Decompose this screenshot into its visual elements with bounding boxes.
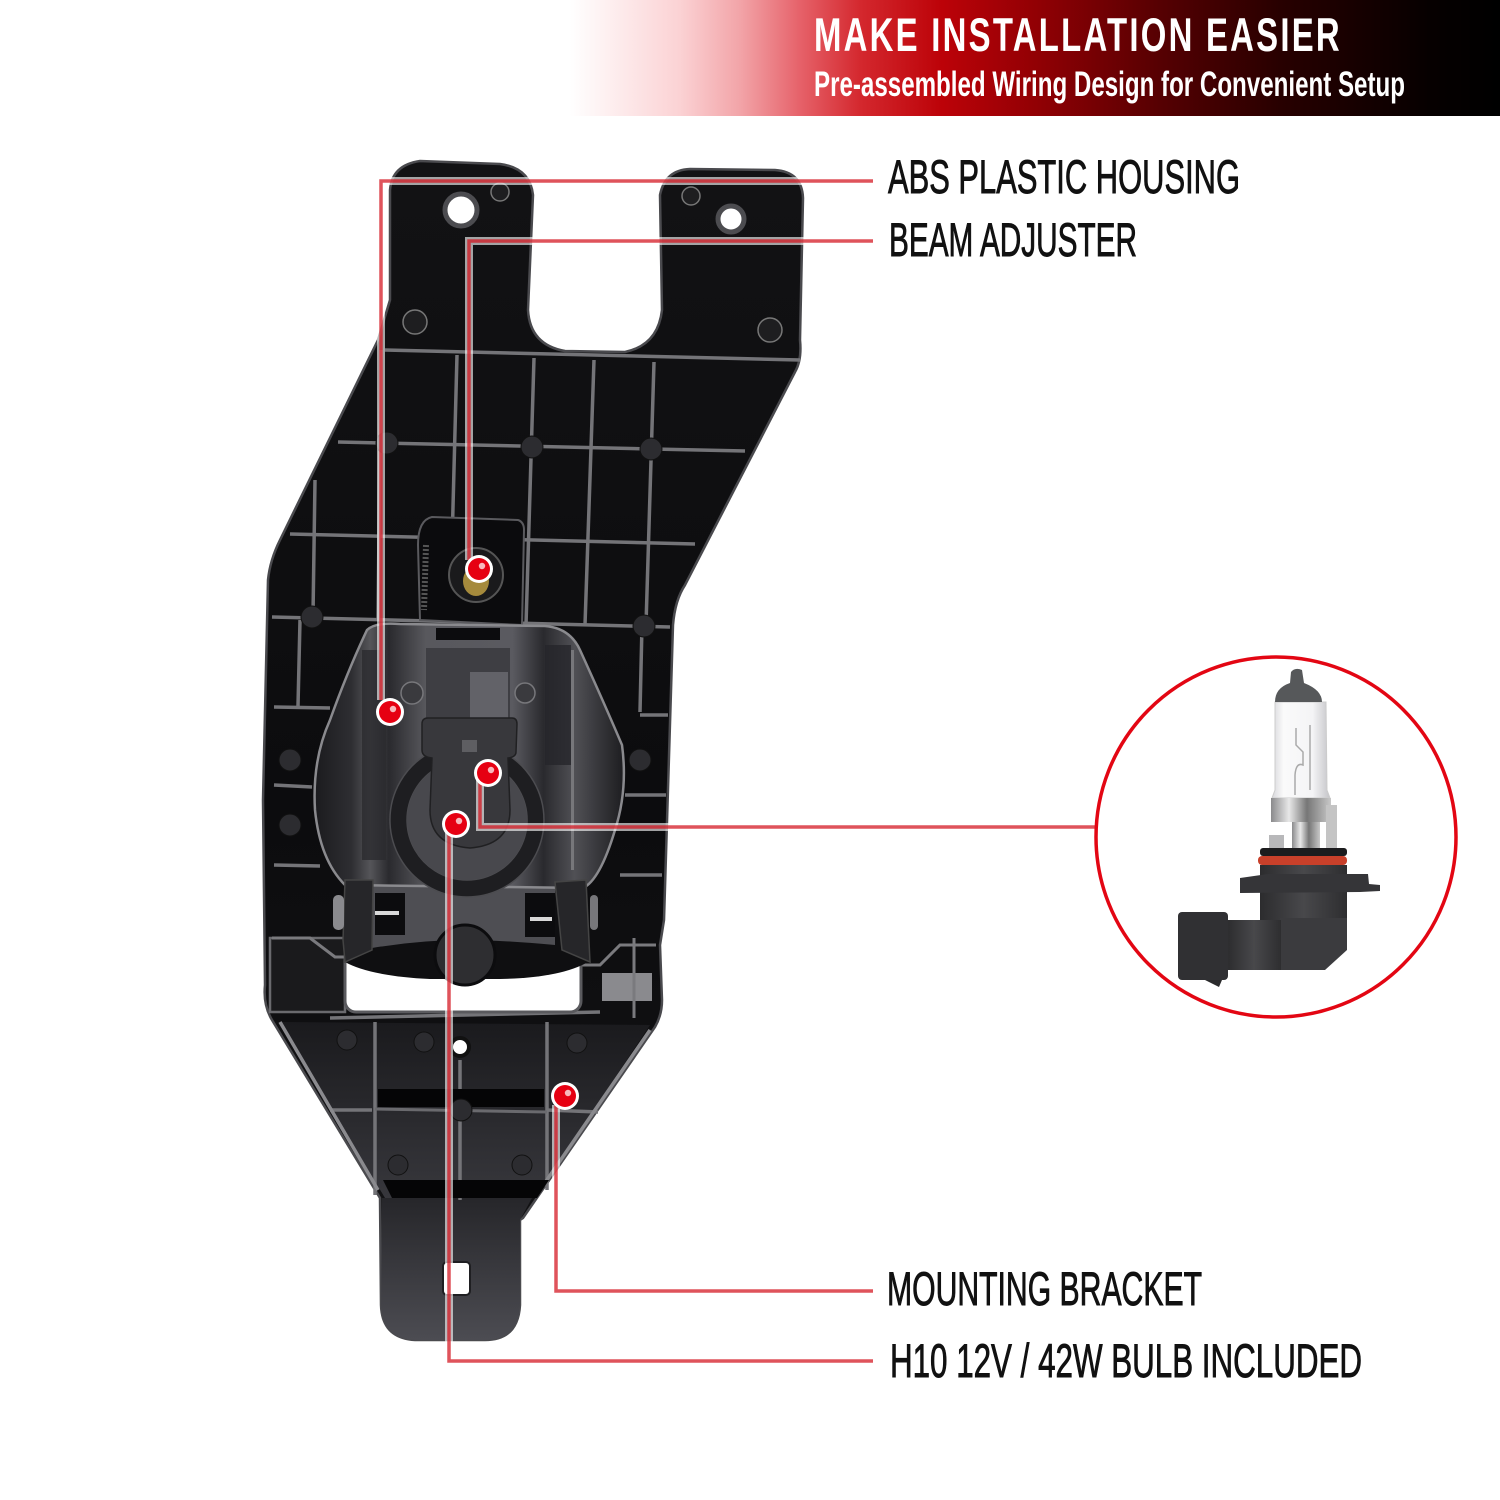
bulb socket ring (390, 743, 544, 897)
h10 halogen bulb (1178, 669, 1380, 987)
lamp housing (315, 624, 624, 888)
marker: beam adjuster (465, 555, 493, 583)
bulb base (1260, 865, 1347, 921)
connector tube (1227, 920, 1281, 970)
mounting hole left (445, 194, 477, 226)
filament (1295, 725, 1310, 795)
hinge silver clip left (375, 911, 399, 915)
dark shadow bands (378, 1089, 549, 1198)
socket inner (407, 760, 527, 880)
adjuster nut (449, 548, 503, 602)
lower-right pocket glossy patch (602, 973, 652, 1001)
adjuster spring (424, 545, 426, 610)
bulb detail inset (1096, 657, 1456, 1017)
metal centre column (1292, 822, 1320, 848)
label: abs plastic housing: ABS PLASTIC HOUSING (888, 150, 1240, 203)
marker: h10 bulb (442, 810, 470, 838)
flange (1240, 874, 1380, 893)
rib across lower plate (375, 1109, 547, 1112)
callout leader lines (381, 181, 1095, 1361)
hinge bolt left (333, 895, 344, 930)
orange o-ring (1258, 856, 1347, 865)
connector lock tab (462, 740, 477, 752)
plug clip (1205, 980, 1222, 987)
lamp side hinge right (555, 880, 590, 962)
inset circle frame (1096, 657, 1456, 1017)
lower-left pocket (270, 938, 345, 1012)
bracket silhouette (263, 161, 803, 1340)
rib junction dots (279, 432, 662, 1175)
electrical connector (422, 718, 517, 848)
small centre hole (451, 1038, 469, 1056)
hinge clip right (525, 893, 555, 937)
lamp surface panels (362, 628, 574, 870)
header banner (570, 0, 1500, 116)
glass envelope (1272, 702, 1330, 798)
mounting hole right (718, 206, 744, 232)
banner title: MAKE INSTALLATION EASIER (814, 8, 1340, 61)
tab slot (443, 1262, 470, 1295)
black seal ring (1260, 848, 1347, 856)
lamp opening (345, 950, 581, 1012)
hinge bolt right (590, 895, 598, 930)
lower lamp knob (435, 925, 495, 985)
plug end (1178, 912, 1228, 980)
callout markers (376, 555, 579, 1110)
marker: abs housing (376, 698, 404, 726)
marker: bulb callout (474, 759, 502, 787)
plate ribs grid (272, 350, 800, 1200)
callout labels (887, 150, 1362, 1387)
lamp lower panel (372, 885, 555, 948)
hinge silver clip right (530, 917, 552, 921)
fog light bracket product illustration (263, 161, 803, 1340)
lamp lower body (345, 885, 588, 979)
banner gradient background (570, 0, 1500, 116)
label: mounting bracket: MOUNTING BRACKET (887, 1262, 1202, 1315)
metal left leg (1269, 835, 1284, 848)
adjuster spring housing (418, 517, 524, 625)
lower-right pocket shelf (582, 938, 656, 1018)
brass screw (463, 566, 489, 596)
grey tip cap (1275, 669, 1322, 702)
rivets on upper plate (403, 183, 782, 342)
lower plate (280, 1022, 650, 1198)
elbow (1280, 918, 1347, 970)
lower-left pocket shelf (272, 938, 345, 957)
mounting tab (381, 1198, 532, 1340)
line cores (381, 181, 1095, 1361)
metal collar (1271, 798, 1331, 822)
marker: mounting bracket (551, 1082, 579, 1110)
hinge clip left (375, 893, 405, 935)
metal right leg (1326, 805, 1337, 848)
label: beam adjuster: BEAM ADJUSTER (889, 213, 1137, 266)
lamp adjuster screws (401, 682, 535, 704)
lamp side hinge left (343, 880, 373, 962)
line halos (381, 181, 1095, 1361)
